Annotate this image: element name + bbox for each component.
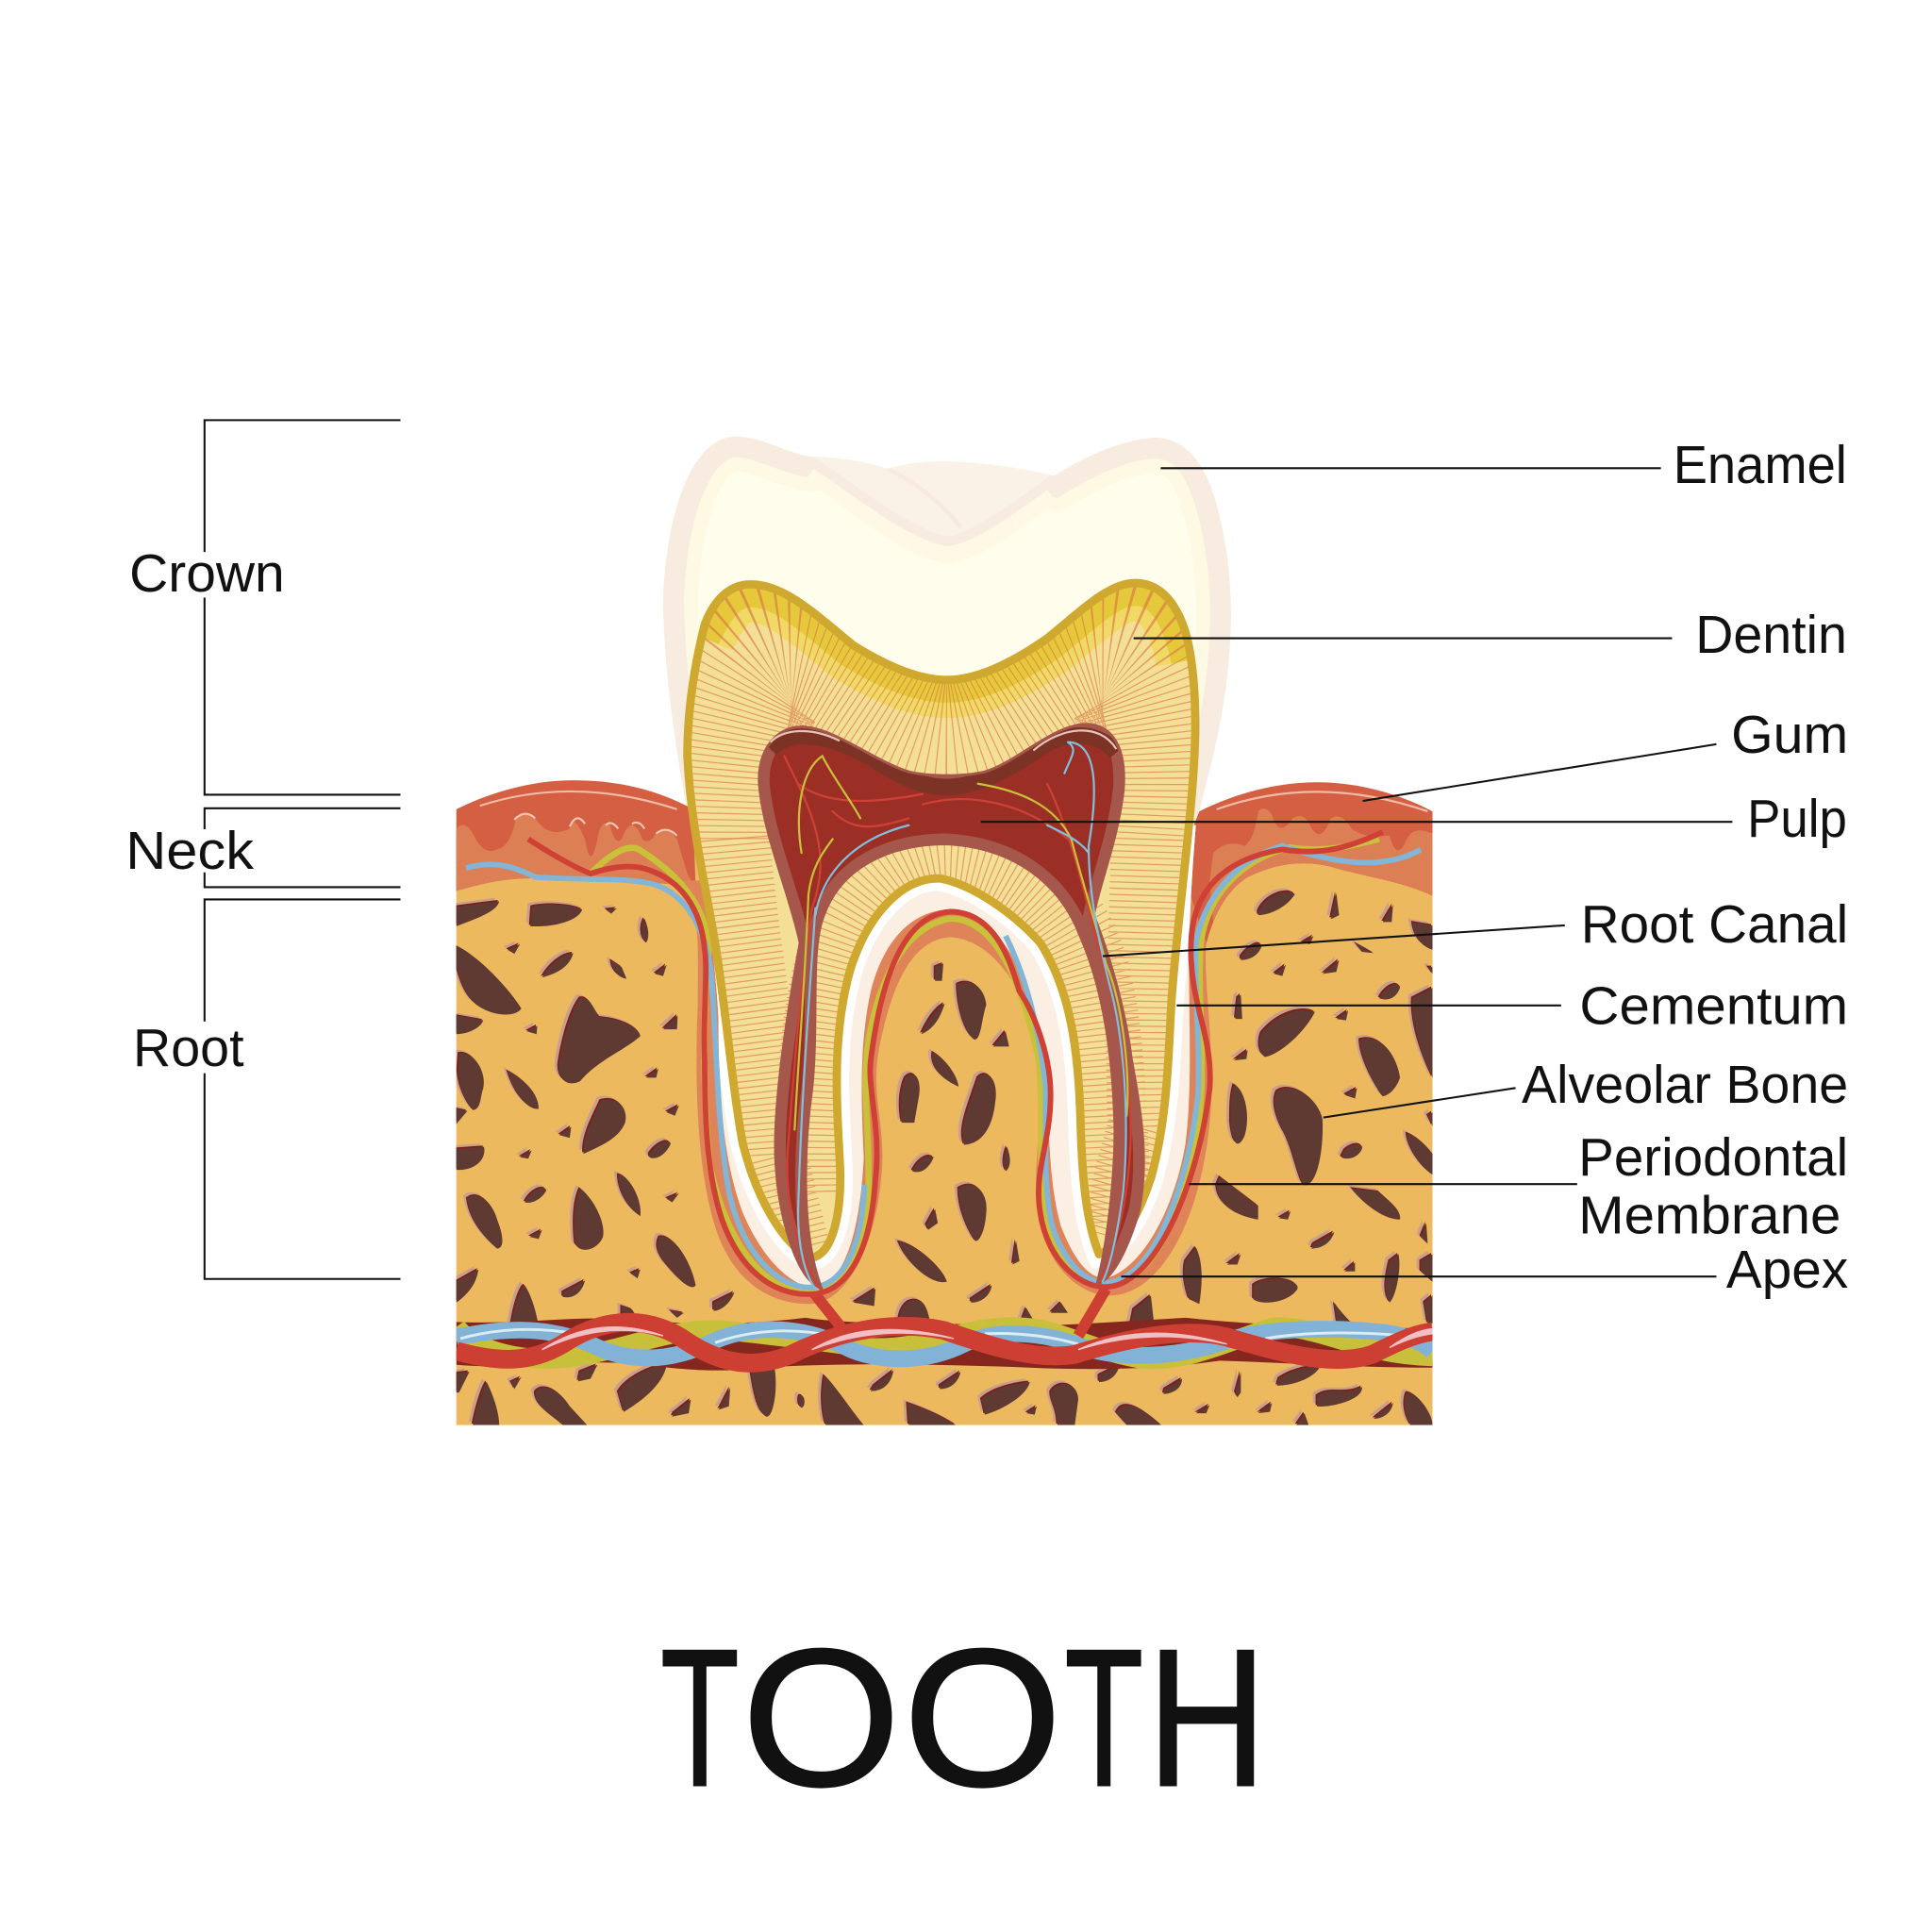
title: T (1064, 1609, 1143, 1828)
panel: alveolar bone (452, 839, 1433, 1425)
label: Root: Root (133, 1018, 244, 1077)
bracket: neck (205, 808, 400, 887)
title: H (1147, 1609, 1267, 1828)
leader: Dentin (1134, 638, 1672, 640)
bracket: root (205, 899, 400, 1279)
label: Apex: Apex (1726, 1240, 1848, 1299)
gum: right (1186, 782, 1433, 950)
enamel crown (653, 424, 1241, 839)
label: Gum: Gum (1731, 705, 1848, 764)
label: Crown: Crown (129, 543, 285, 603)
leader: Alveolar Bone (1324, 1088, 1516, 1118)
title (660, 1609, 1267, 1828)
label: Periodontal Membrane: Membrane (1578, 1185, 1840, 1244)
title: O (741, 1609, 901, 1828)
label: Periodontal Membrane (1578, 1127, 1848, 1244)
label: Neck: Neck (125, 821, 255, 880)
label: Periodontal Membrane: Periodontal (1578, 1127, 1848, 1187)
label: Cementum: Cementum (1579, 975, 1848, 1035)
leader: Pulp (981, 821, 1732, 823)
periodontal vessels: green, blue, red (466, 832, 1421, 1294)
title: O (903, 1609, 1062, 1828)
leader: Periodontal Membrane (1189, 1183, 1577, 1185)
dentin (688, 583, 1195, 1257)
leader: Enamel (1160, 467, 1661, 469)
title: T (660, 1609, 740, 1828)
periodontal membrane (682, 880, 1211, 1304)
leader: Root Canal (1103, 925, 1565, 957)
cementum (713, 824, 1196, 1285)
pulp and root canals (760, 725, 1142, 1292)
label: Dentin: Dentin (1695, 605, 1847, 664)
label: Pulp: Pulp (1747, 789, 1847, 848)
leader: Cementum (1176, 1005, 1561, 1007)
leader: Gum (1363, 744, 1716, 801)
leader: Apex (1122, 1275, 1716, 1277)
label: Enamel: Enamel (1674, 435, 1847, 494)
gum: left (457, 780, 695, 891)
blood vessel bundle at base (457, 1289, 1433, 1371)
nerves and vessels in pulp (784, 742, 1131, 1292)
tooth cross-section illustration (452, 424, 1433, 1425)
label: Alveolar Bone: Alveolar Bone (1522, 1055, 1848, 1114)
bracket: crown (205, 420, 400, 794)
label: Root Canal: Root Canal (1581, 894, 1848, 954)
